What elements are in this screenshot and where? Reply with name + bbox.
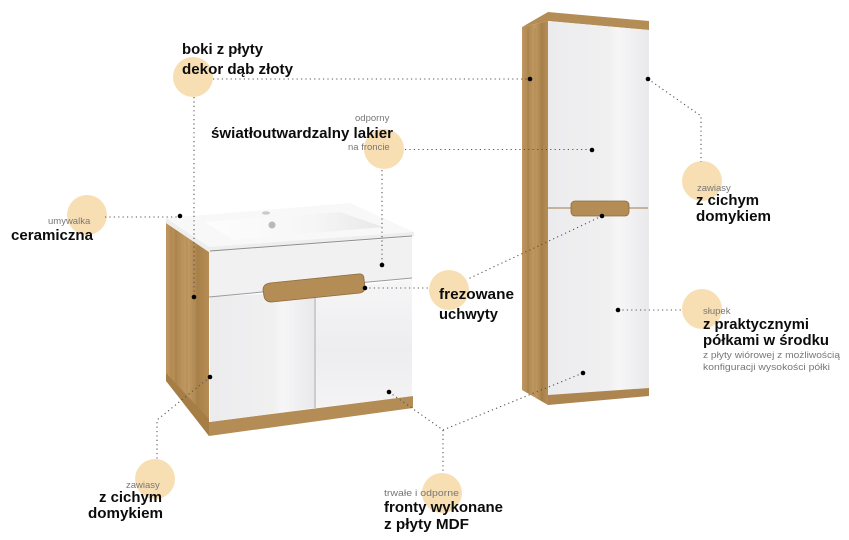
label: hinges left: z cichym [99,490,162,506]
label: MDF fronts [384,488,503,533]
top panel [522,12,649,30]
label: side panels: boki z płyty [182,42,263,58]
right door [316,279,412,408]
left door [210,291,314,422]
label: hinges right [696,183,771,225]
label: milled handles: frezowane [439,287,514,303]
drawer front [209,237,412,297]
wooden handle [263,274,365,302]
side panel [522,21,548,405]
label: lacquer [211,113,393,153]
label: milled handles [439,287,514,323]
label: side panels [182,42,293,78]
label: MDF fronts: trwałe i odporne [384,488,459,499]
label: tall cabinet shelves: z praktycznymi [703,317,809,333]
label: lacquer: światłoutwardzalny lakier [211,126,393,142]
label: milled handles: uchwyty [439,307,498,323]
cabinet plinth [209,396,413,436]
label: hinges left: zawiasy [126,480,160,491]
marker dots [178,77,650,394]
label: MDF fronts: fronty wykonane [384,500,503,516]
label: hinges left: domykiem [88,506,163,522]
label: tall cabinet shelves [703,306,841,373]
wooden handle [571,201,629,216]
label: lacquer: odporny [355,113,390,124]
label: tall cabinet shelves: konfiguracji wysokości półki [703,362,830,373]
label: MDF fronts: z płyty MDF [384,517,469,533]
dotted leader lines [105,79,701,474]
cabinet side panel [166,222,209,436]
label: hinges right: z cichym [696,193,759,209]
upper and lower front [548,21,649,395]
label: tall cabinet shelves: półkami w środku [703,333,829,349]
label: side panels: dekor dąb złoty [182,62,293,78]
label: ceramic sink [11,216,94,244]
label: ceramic sink: ceramiczna [11,228,94,244]
label: lacquer: na froncie [348,142,390,153]
base [548,388,649,405]
ceramic sink [166,203,414,252]
label: hinges left [88,480,163,522]
tall cabinet [522,12,649,405]
label: hinges right: zawiasy [697,183,731,194]
label: ceramic sink: umywalka [48,216,91,227]
label: hinges right: domykiem [696,209,771,225]
label: tall cabinet shelves: słupek [703,306,731,317]
label: tall cabinet shelves: z płyty wiórowej z możliwością [703,350,841,361]
beige accent circles [67,57,722,513]
vanity cabinet with sink [166,203,414,436]
